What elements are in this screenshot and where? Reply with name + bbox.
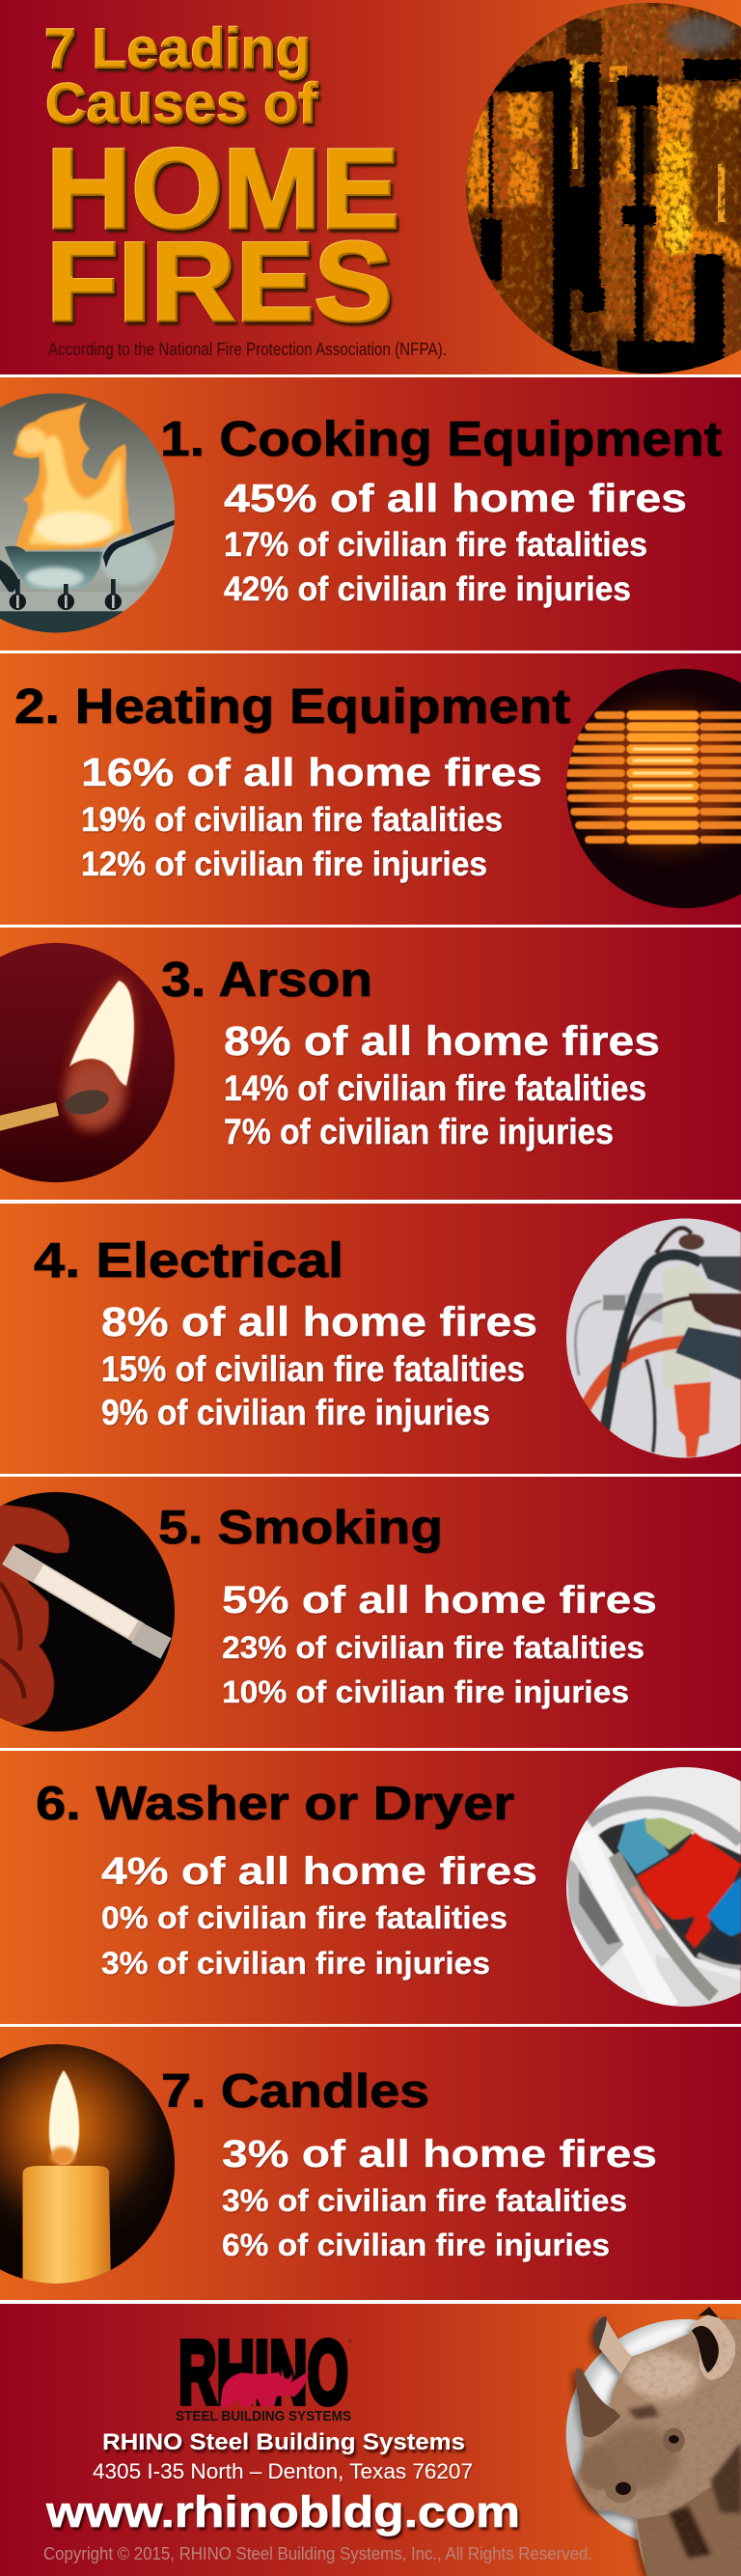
- heading: 7. Candles: [161, 2065, 429, 2118]
- photo: overloaded power strip: [560, 1211, 741, 1467]
- heading: 3. Arson: [161, 952, 372, 1007]
- divider: [0, 2024, 741, 2027]
- statistics: [224, 476, 687, 608]
- title: FIRES: [46, 218, 393, 345]
- photo: candle: [0, 2036, 178, 2292]
- divider: [0, 374, 741, 377]
- statistics: 12% of civilian fire injuries: [81, 845, 487, 883]
- statistics: [222, 2133, 657, 2262]
- statistics: [101, 1299, 537, 1432]
- logo: RHINO Steel Building Systems: STEEL BUILDING SYSTEMS: [176, 2408, 351, 2424]
- statistics: 17% of civilian fire fatalities: [224, 526, 647, 564]
- statistics: 3% of civilian fire fatalities: [222, 2183, 627, 2218]
- photo: lit cigarette: [0, 1486, 178, 1737]
- title: [44, 17, 399, 345]
- heading: 4. Electrical: [34, 1233, 343, 1288]
- divider: [0, 2300, 741, 2304]
- heading: 5. Smoking: [158, 1502, 443, 1554]
- statistics: 23% of civilian fire fatalities: [222, 1630, 645, 1665]
- statistics: 19% of civilian fire fatalities: [81, 801, 503, 839]
- copyright: Copyright © 2015, RHINO Steel Building Systems, Inc., All Rights Reserved.: [43, 2543, 592, 2563]
- statistics: 8% of all home fires: [101, 1299, 537, 1345]
- illustration: rhino head: [566, 2307, 741, 2576]
- title: HOME: [46, 125, 399, 253]
- statistics: [224, 1018, 660, 1151]
- divider: [0, 1748, 741, 1751]
- statistics: 8% of all home fires: [224, 1018, 660, 1065]
- statistics: 6% of civilian fire injuries: [222, 2228, 610, 2262]
- company name: RHINO Steel Building Systems: [102, 2429, 465, 2455]
- divider: [0, 1200, 741, 1204]
- website: www.rhinobldg.com: [45, 2487, 520, 2536]
- photo: heater coils: [564, 666, 741, 912]
- photo: flaming pan: [0, 394, 175, 633]
- photo: burning match: [0, 941, 178, 1187]
- panel: 6 washer or dryer: [0, 1751, 741, 2024]
- panel: 3 arson: [0, 928, 741, 1200]
- statistics: 7% of civilian fire injuries: [224, 1112, 614, 1151]
- statistics: 4% of all home fires: [101, 1850, 537, 1893]
- source note: According to the National Fire Protection Association (NFPA).: [48, 340, 447, 359]
- statistics: 10% of civilian fire injuries: [222, 1675, 629, 1709]
- panel: 1 cooking equipment: [0, 377, 741, 651]
- statistics: [222, 1579, 657, 1709]
- logo: RHINO Steel Building Systems: RHINO: [178, 2322, 348, 2423]
- panel: 4 electrical: [0, 1204, 741, 1474]
- panel: 2 heating equipment: [0, 653, 741, 925]
- title: Causes of: [45, 72, 318, 135]
- heading: 1. Cooking Equipment: [160, 411, 722, 466]
- statistics: 15% of civilian fire fatalities: [101, 1349, 525, 1389]
- statistics: 0% of civilian fire fatalities: [101, 1900, 508, 1935]
- photo: burning house: [463, 0, 741, 376]
- statistics: 3% of civilian fire injuries: [101, 1946, 490, 1980]
- panel: header: [0, 0, 741, 376]
- statistics: [101, 1850, 537, 1980]
- statistics: 14% of civilian fire fatalities: [224, 1068, 646, 1108]
- panel: footer: [0, 2304, 741, 2576]
- logo: RHINO Steel Building Systems: ®: [348, 2339, 352, 2345]
- divider: [0, 925, 741, 928]
- panel: 7 candles: [0, 2027, 741, 2300]
- statistics: 3% of all home fires: [222, 2133, 657, 2175]
- statistics: 16% of all home fires: [81, 750, 542, 794]
- heading: 2. Heating Equipment: [14, 679, 570, 734]
- statistics: 5% of all home fires: [222, 1579, 657, 1621]
- statistics: 42% of civilian fire injuries: [224, 570, 631, 608]
- divider: [0, 651, 741, 653]
- heading: 6. Washer or Dryer: [36, 1778, 514, 1830]
- address: 4305 I-35 North – Denton, Texas 76207: [93, 2459, 473, 2483]
- divider: [0, 1474, 741, 1477]
- panel: 5 smoking: [0, 1477, 741, 1748]
- photo: dryer with laundry: [560, 1761, 741, 2012]
- statistics: 45% of all home fires: [224, 476, 687, 520]
- title: 7 Leading: [44, 17, 311, 80]
- statistics: [81, 750, 542, 883]
- logo: RHINO Steel Building Systems: [176, 2322, 352, 2424]
- statistics: 9% of civilian fire injuries: [101, 1393, 490, 1432]
